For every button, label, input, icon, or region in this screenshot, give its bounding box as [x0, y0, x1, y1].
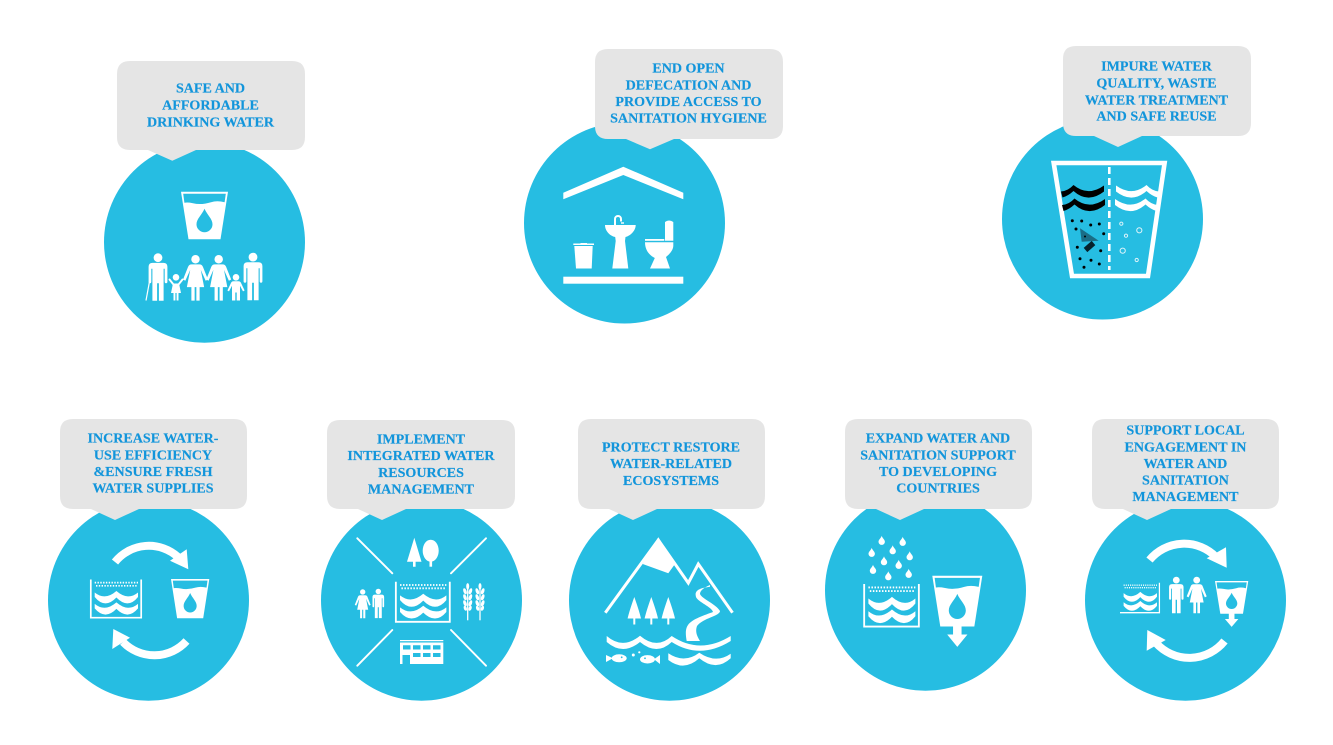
panel: support local engagement: [1085, 419, 1286, 701]
icon: glass divided: [1054, 163, 1165, 276]
circle: [104, 142, 305, 343]
icon: pollutants: [1071, 219, 1105, 269]
callout text: EXPAND WATER AND: [866, 431, 1010, 447]
callout text: AND SAFE REUSE: [1096, 109, 1217, 125]
callout text: INCREASE WATER-: [87, 431, 219, 447]
callout text: SANITATION HYGIENE: [610, 111, 767, 127]
icon: rain drops: [868, 536, 913, 580]
circle: [825, 490, 1026, 691]
panel: safe and affordable drinking water: [104, 61, 305, 343]
callout: [117, 61, 305, 161]
icon: floor: [563, 277, 683, 284]
callout text: SANITATION SUPPORT: [860, 448, 1016, 464]
callout text: END OPEN: [652, 61, 725, 77]
callout text: MANAGEMENT: [368, 482, 475, 498]
callout text: RESOURCES: [378, 465, 464, 481]
icon: glass with down arrow: [1215, 581, 1248, 627]
icon: water glass: [181, 192, 228, 239]
arrow: top cycle: [1150, 544, 1227, 568]
icon: water tank: [864, 584, 919, 627]
callout text: INTEGRATED WATER: [347, 448, 495, 464]
icon: river: [686, 585, 720, 641]
panel: expand support to developing countries: [825, 419, 1032, 691]
callout text: WATER SUPPLIES: [92, 481, 214, 497]
icon: fish: [606, 651, 660, 664]
callout text: IMPURE WATER: [1101, 59, 1213, 75]
callout text: TO DEVELOPING: [879, 464, 997, 480]
icon: wheat: [462, 583, 485, 620]
callout: [845, 419, 1032, 520]
panel: integrated water resources management: [321, 420, 522, 701]
callout text: WATER TREATMENT: [1085, 92, 1229, 108]
icon: water tank: [1120, 583, 1159, 613]
circle: [524, 122, 725, 324]
callout text: MANAGEMENT: [1132, 489, 1239, 505]
circle: [1085, 500, 1286, 701]
icon: couple: [1169, 577, 1207, 613]
icon: building: [400, 640, 443, 664]
icon: family: [146, 253, 262, 301]
icon: glass with down arrow: [932, 576, 982, 647]
arrow: top cycle: [115, 546, 188, 569]
icon: dividing lines: [357, 538, 486, 666]
callout text: DRINKING WATER: [147, 114, 275, 130]
panel: water quality and wastewater: [1002, 46, 1251, 320]
callout text: ENGAGEMENT IN: [1125, 439, 1246, 455]
callout text: SUPPORT LOCAL: [1126, 423, 1245, 439]
callout: [1063, 46, 1251, 147]
arrow: bottom cycle: [112, 629, 186, 655]
callout text: PROTECT RESTORE: [602, 439, 740, 455]
icon: water glass: [171, 579, 209, 618]
callout: [60, 419, 247, 520]
callout text: PROVIDE ACCESS TO: [615, 94, 762, 110]
callout: [595, 49, 783, 149]
icon: dirty water waves: [1061, 185, 1105, 211]
icon: pine trees: [628, 597, 675, 624]
arrow: bottom cycle: [1147, 630, 1224, 658]
circle: [48, 500, 249, 701]
icon: mountains: [605, 537, 732, 613]
circle: [569, 500, 770, 701]
icon: trees: [407, 538, 439, 567]
callout text: QUALITY, WASTE: [1096, 76, 1217, 92]
callout text: WATER-RELATED: [610, 456, 732, 472]
circle: [1002, 118, 1203, 320]
callout: [327, 420, 515, 520]
callout text: SAFE AND: [176, 81, 245, 97]
callout text: AFFORDABLE: [162, 98, 259, 114]
icon: clean water waves: [1115, 185, 1159, 211]
icon: house roof: [563, 167, 683, 199]
callout text: DEFECATION AND: [626, 78, 751, 94]
panel: protect water-related ecosystems: [569, 419, 770, 701]
callout text: COUNTRIES: [896, 481, 980, 497]
icon: water waves: [607, 636, 731, 666]
icon: toilet: [645, 220, 673, 268]
icon: water tank: [91, 580, 141, 618]
icon: clean bubbles: [1120, 222, 1142, 262]
callout: [1092, 419, 1279, 520]
callout text: SANITATION: [1142, 473, 1229, 489]
icon: sink: [605, 216, 636, 268]
callout text: &ENSURE FRESH: [93, 464, 213, 480]
icon: bin: [573, 243, 594, 268]
callout text: USE EFFICIENCY: [94, 448, 212, 464]
icon: couple: [355, 589, 384, 618]
callout: [578, 419, 765, 520]
panel: end open defecation and sanitation: [524, 49, 783, 324]
circle: [321, 500, 522, 701]
callout text: WATER AND: [1144, 456, 1227, 472]
icon: water tank: [396, 582, 450, 622]
callout text: ECOSYSTEMS: [623, 473, 719, 489]
panel: water-use efficiency: [48, 419, 249, 701]
callout text: IMPLEMENT: [377, 432, 466, 448]
